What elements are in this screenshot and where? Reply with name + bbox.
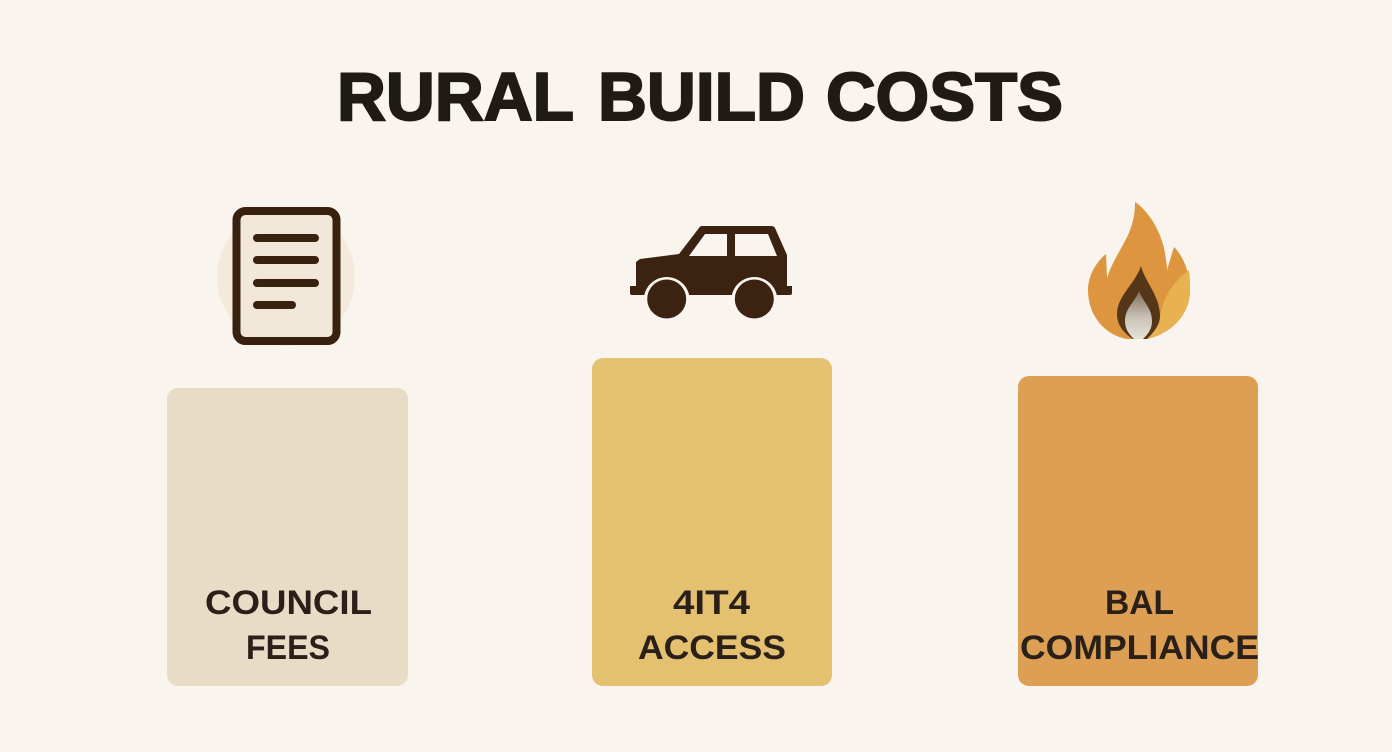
icon: 4x4 vehicle: [625, 226, 797, 325]
title: RURAL: [337, 59, 574, 135]
icon: flame: [1088, 202, 1190, 339]
title: COSTS: [826, 59, 1063, 135]
label: BAL compliance: COMPLIANCE: [1020, 629, 1259, 667]
label: BAL compliance: BAL: [1105, 584, 1174, 622]
label: 4x4 access: ACCESS: [638, 629, 786, 667]
panel: BAL compliance: [1018, 376, 1259, 686]
label: council fees: COUNCIL: [205, 584, 372, 622]
title: BUILD: [598, 59, 805, 135]
panel: 4x4 access: [592, 358, 832, 686]
title: [337, 59, 1063, 135]
label: 4x4 access: [638, 584, 786, 667]
label: BAL compliance: [1020, 584, 1259, 667]
label: 4x4 access: 4IT4: [673, 584, 750, 622]
label: council fees: FEES: [246, 629, 330, 667]
icon: document: [217, 208, 355, 346]
label: council fees: [205, 584, 372, 667]
panel: council fees: [167, 388, 408, 686]
